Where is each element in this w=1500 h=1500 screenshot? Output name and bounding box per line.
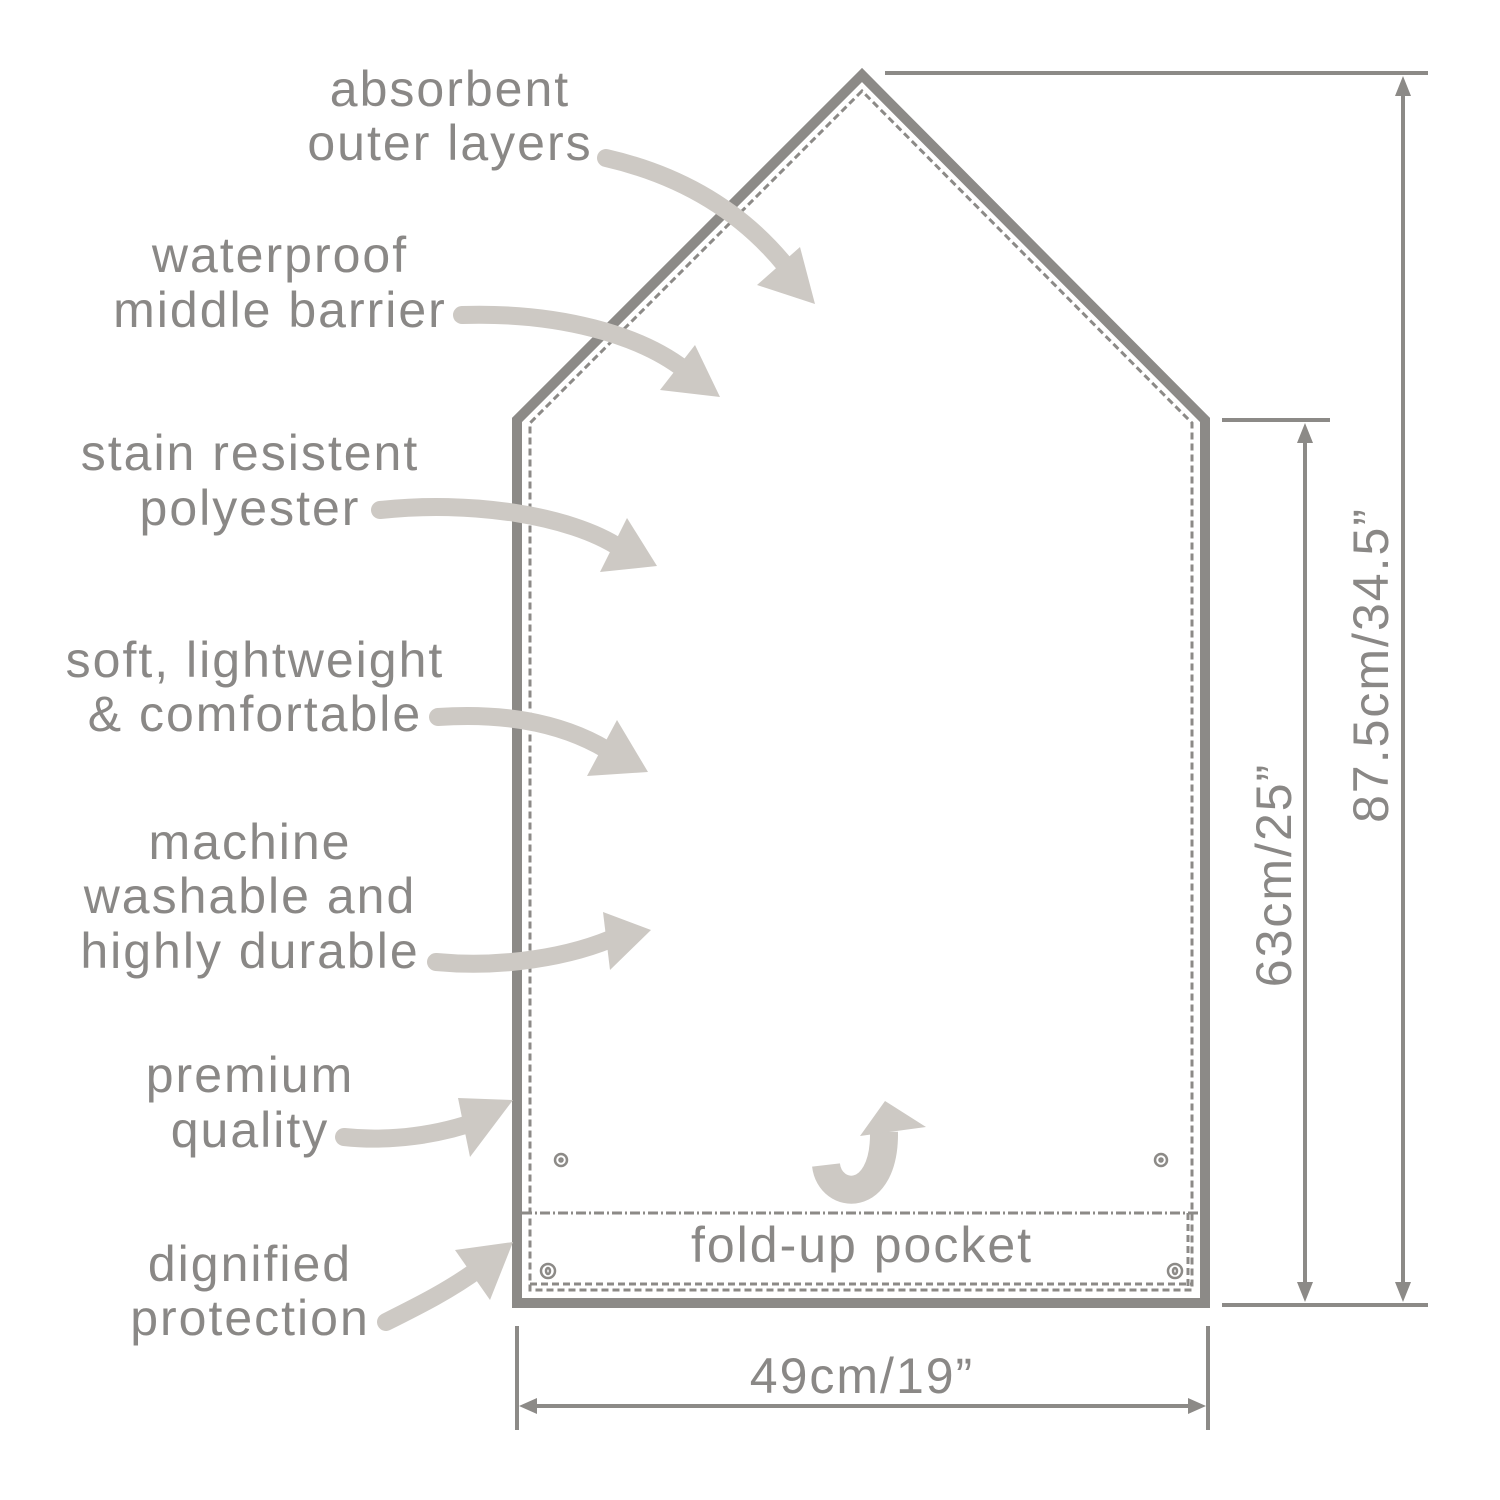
labels: middle barrier — [113, 282, 447, 338]
house-shaped outline — [517, 75, 1205, 1303]
dimension: heights — [885, 73, 1428, 1305]
labels: highly durable — [80, 923, 420, 979]
dimension: width — [517, 1326, 1208, 1430]
fold-up pocket label: fold-up pocket — [691, 1217, 1033, 1273]
labels: waterproof — [151, 227, 408, 283]
callout arrows — [344, 158, 785, 1322]
labels: soft, lightweight — [66, 632, 444, 688]
labels: machine — [148, 814, 352, 870]
text: 63cm/25” — [1246, 763, 1302, 987]
labels: washable and — [83, 868, 416, 924]
text: 87.5cm/34.5” — [1343, 507, 1399, 823]
labels: outer layers — [307, 115, 593, 171]
snaps — [541, 1154, 1182, 1278]
labels: polyester — [140, 480, 360, 536]
labels: premium — [146, 1047, 354, 1103]
labels — [66, 61, 593, 1346]
labels: & comfortable — [88, 686, 422, 742]
labels: dignified — [148, 1236, 352, 1292]
icon: fold-up curved arrow — [826, 1101, 926, 1190]
pocket fold line — [522, 1213, 1200, 1290]
labels: quality — [171, 1102, 329, 1158]
labels: stain resistent — [81, 425, 419, 481]
text: 49cm/19” — [750, 1348, 974, 1404]
labels: protection — [130, 1290, 370, 1346]
labels: absorbent — [330, 61, 570, 117]
